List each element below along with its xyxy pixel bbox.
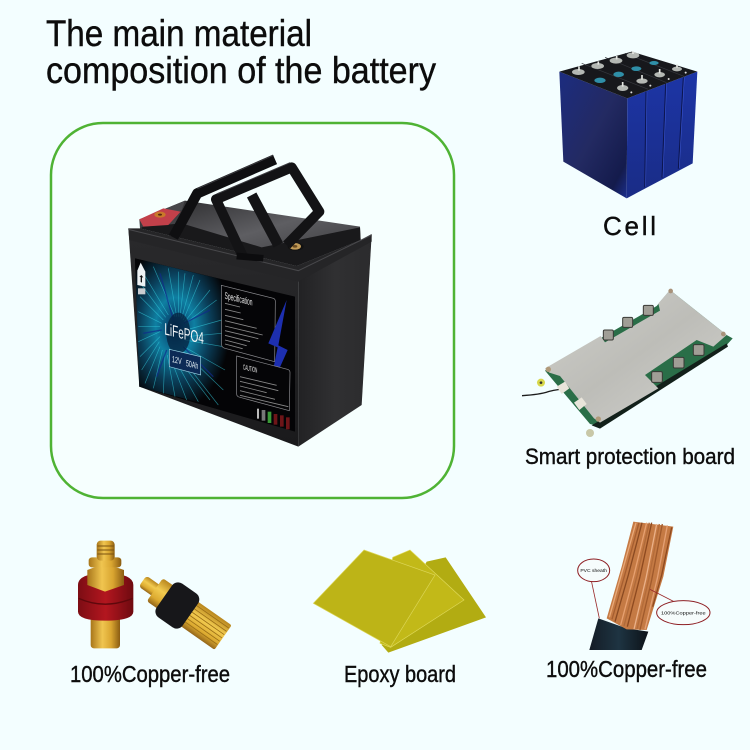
voltage and capacity: [169, 349, 201, 375]
cable photo: [578, 522, 710, 650]
title: composition of the battery: [46, 50, 436, 91]
battery label: [135, 258, 295, 432]
aluminium plate: [545, 290, 727, 423]
wire: [522, 388, 563, 396]
brand arrow logo: [137, 263, 145, 294]
lightning bolt: [268, 300, 288, 393]
red terminal: [139, 208, 181, 227]
cell top: [559, 52, 697, 98]
battery right side: [298, 235, 372, 447]
cell photo: [559, 51, 697, 198]
battery lid: [139, 201, 361, 266]
caution box: [237, 356, 290, 411]
main battery photo: [128, 155, 372, 447]
back board: [382, 557, 486, 653]
copper strands: [607, 522, 673, 630]
protection board label: Smart protection board: [525, 444, 735, 469]
voltage and capacity: 50Ah: [186, 358, 198, 371]
mosfet blocks: [603, 305, 704, 382]
PVC sheath callout: PVC sheath: [580, 568, 608, 573]
specification box: [221, 285, 275, 362]
specification box: Specification: [225, 291, 252, 309]
green pcb: [545, 290, 733, 427]
epoxy boards: [313, 550, 486, 653]
middle board: [380, 550, 464, 647]
cell right face: [627, 72, 697, 198]
burst rays: [138, 267, 225, 405]
red terminal post: [78, 541, 133, 648]
cell terminals: [572, 51, 687, 93]
voltage and capacity: 12V: [172, 354, 182, 366]
caution box: CAUTION: [243, 362, 257, 375]
terminals label: 100%Copper-free: [70, 661, 230, 687]
cell label: Cell: [603, 211, 656, 241]
front board: [313, 550, 435, 647]
cell left face: [559, 72, 627, 198]
panel: main battery frame: [51, 123, 454, 498]
safety icons: [257, 409, 290, 429]
epoxy label: Epoxy board: [344, 661, 456, 687]
LiFePO4 text: LiFePO4: [164, 319, 204, 348]
cable sheath: [589, 618, 648, 650]
protection board photo: [522, 289, 733, 437]
connectors: [537, 289, 726, 437]
brass terminal: [288, 243, 304, 251]
cable label: 100%Copper-free: [546, 656, 707, 682]
title: The main material: [46, 13, 312, 54]
battery handle: [173, 155, 319, 258]
copper callout: 100%Copper-free: [661, 610, 706, 615]
battery front: [128, 228, 298, 447]
black terminal post: [131, 564, 235, 654]
title: [46, 13, 436, 91]
terminals photo: [78, 541, 235, 654]
